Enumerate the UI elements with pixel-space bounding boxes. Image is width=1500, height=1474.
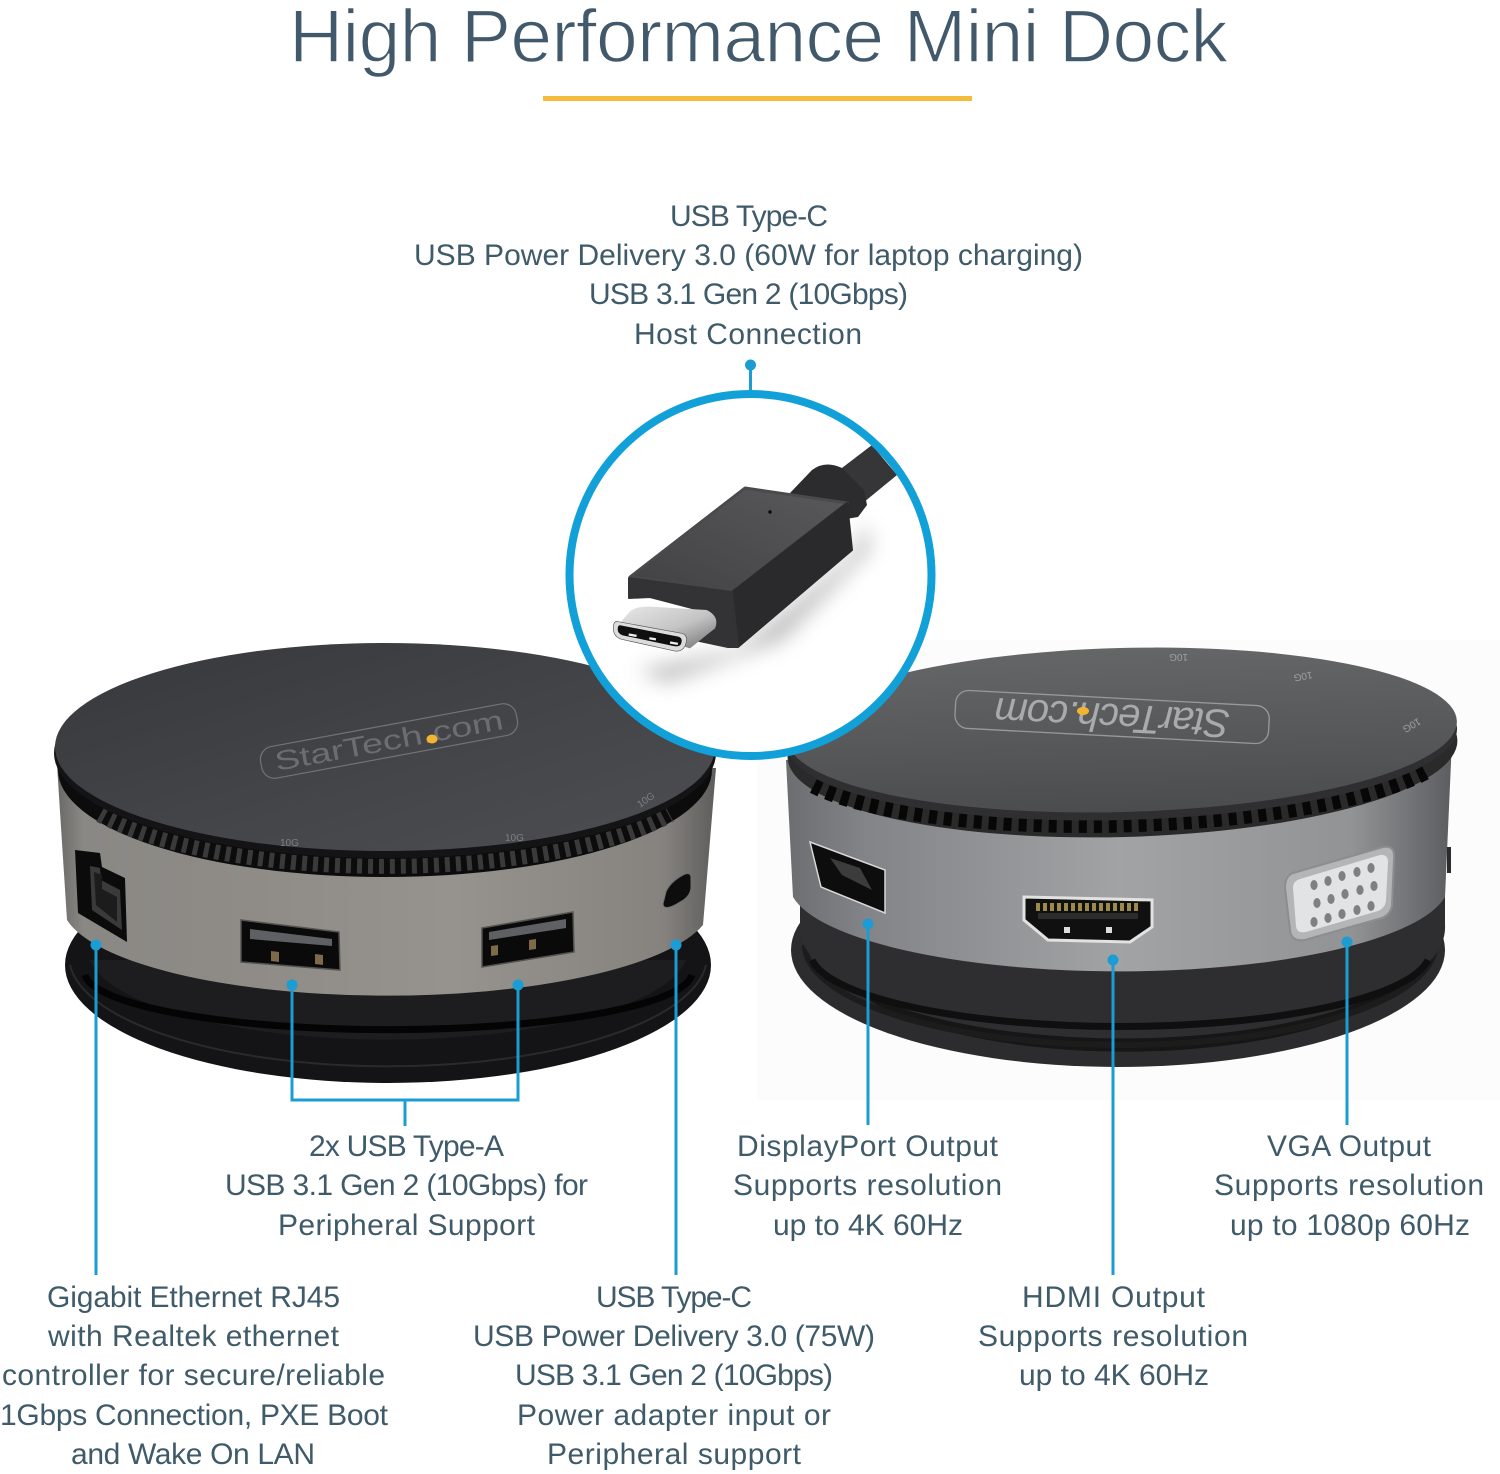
top disc bbox=[54, 643, 716, 858]
leader: host USB-C bbox=[745, 360, 756, 390]
callout: USB Type-C peripheral: USB 3.1 Gen 2 (10Gbps) bbox=[515, 1359, 833, 1392]
panel: USB-C connector inset bbox=[570, 394, 932, 756]
callout: USB Type-C peripheral: USB Power Delivery 3.0 (75W) bbox=[473, 1320, 875, 1353]
port labels: 10G bbox=[505, 833, 524, 844]
callout: host USB Type-C: USB Type-C bbox=[670, 200, 828, 233]
port: USB-C bbox=[663, 874, 691, 908]
callout: USB Type-A: Peripheral Support bbox=[278, 1209, 536, 1242]
title underline bbox=[543, 96, 972, 101]
leader: RJ45 bbox=[90, 940, 102, 1275]
metal plug bbox=[613, 607, 716, 651]
panel: left dock bbox=[54, 643, 716, 1083]
callout: Gigabit Ethernet: Gigabit Ethernet RJ45 bbox=[47, 1281, 340, 1314]
callout: Gigabit Ethernet: controller for secure/reliable bbox=[2, 1359, 385, 1392]
leader: USB-C peripheral bbox=[670, 940, 682, 1275]
callout: USB Type-A bbox=[225, 1130, 588, 1242]
callout: HDMI: Supports resolution bbox=[978, 1320, 1248, 1353]
strain relief bbox=[790, 464, 867, 520]
callout: Gigabit Ethernet bbox=[0, 1281, 389, 1471]
callout: USB Type-C peripheral: Power adapter input or bbox=[517, 1399, 831, 1432]
callout: host USB Type-C: USB 3.1 Gen 2 (10Gbps) bbox=[589, 278, 908, 311]
port labels: 10G bbox=[1292, 669, 1313, 683]
logo dot bbox=[426, 734, 438, 744]
callout: HDMI bbox=[978, 1281, 1248, 1392]
logo plate: StarTech.com bbox=[993, 689, 1231, 745]
callout: VGA: Supports resolution bbox=[1214, 1169, 1484, 1202]
callout: DisplayPort: up to 4K 60Hz bbox=[773, 1209, 963, 1242]
inset ring bbox=[570, 394, 932, 756]
callout: VGA bbox=[1214, 1130, 1484, 1242]
port labels bbox=[280, 790, 657, 849]
callout: USB Type-A: USB 3.1 Gen 2 (10Gbps) for bbox=[225, 1169, 588, 1202]
logo plate: StarTech.com bbox=[272, 705, 506, 777]
callout: USB Type-C peripheral bbox=[473, 1281, 875, 1471]
callout: host USB Type-C: Host Connection bbox=[634, 318, 862, 351]
callout: USB Type-C peripheral: USB Type-C bbox=[596, 1281, 752, 1314]
leader: VGA bbox=[1342, 936, 1352, 1125]
callout: VGA: VGA Output bbox=[1267, 1130, 1432, 1163]
port: USB-A 1 bbox=[241, 920, 340, 970]
callout: USB Type-A: 2x USB Type-A bbox=[309, 1130, 504, 1163]
callout: Gigabit Ethernet: with Realtek ethernet bbox=[47, 1320, 340, 1353]
base bbox=[791, 833, 1445, 1067]
connector shadow bbox=[637, 523, 870, 683]
side port bbox=[1447, 847, 1451, 873]
port: DisplayPort bbox=[810, 842, 885, 913]
callout: DisplayPort: Supports resolution bbox=[733, 1169, 1002, 1202]
port labels bbox=[1169, 651, 1422, 734]
leader: DisplayPort bbox=[862, 918, 874, 1125]
callout: DisplayPort: DisplayPort Output bbox=[737, 1130, 999, 1163]
port labels: 10G bbox=[280, 838, 299, 849]
port labels: 10G bbox=[1169, 651, 1188, 662]
connector body bbox=[629, 488, 852, 647]
callout: HDMI: up to 4K 60Hz bbox=[1019, 1359, 1209, 1392]
inset background bbox=[570, 394, 932, 756]
callout: VGA: up to 1080p 60Hz bbox=[1230, 1209, 1470, 1242]
callout: HDMI: HDMI Output bbox=[1022, 1281, 1206, 1314]
port labels: 10G bbox=[1400, 715, 1422, 734]
callout: USB Type-C peripheral: Peripheral support bbox=[547, 1438, 802, 1471]
port: USB-A 2 bbox=[482, 912, 574, 967]
body bbox=[57, 765, 716, 996]
panel: right dock bbox=[785, 639, 1460, 1067]
cable bbox=[842, 446, 897, 500]
leader: USB-A bracket bbox=[286, 980, 524, 1126]
port: RJ45 bbox=[75, 850, 127, 942]
knurled ring bbox=[58, 663, 712, 877]
callout: Gigabit Ethernet: and Wake On LAN bbox=[71, 1438, 315, 1471]
port: VGA bbox=[1285, 847, 1394, 940]
callout: DisplayPort bbox=[733, 1130, 1002, 1242]
knurled ring and top disc bbox=[785, 639, 1460, 846]
port: HDMI bbox=[1024, 897, 1152, 942]
leader: HDMI bbox=[1108, 954, 1118, 1275]
body bbox=[786, 740, 1452, 971]
callout: host USB Type-C bbox=[414, 200, 1083, 351]
base bbox=[65, 847, 711, 1083]
callout: host USB Type-C: USB Power Delivery 3.0 (60W for laptop charging) bbox=[414, 239, 1083, 272]
port labels: 10G bbox=[635, 790, 657, 810]
logo dot bbox=[1077, 707, 1089, 715]
callout: Gigabit Ethernet: 1Gbps Connection, PXE Boot bbox=[0, 1399, 389, 1432]
